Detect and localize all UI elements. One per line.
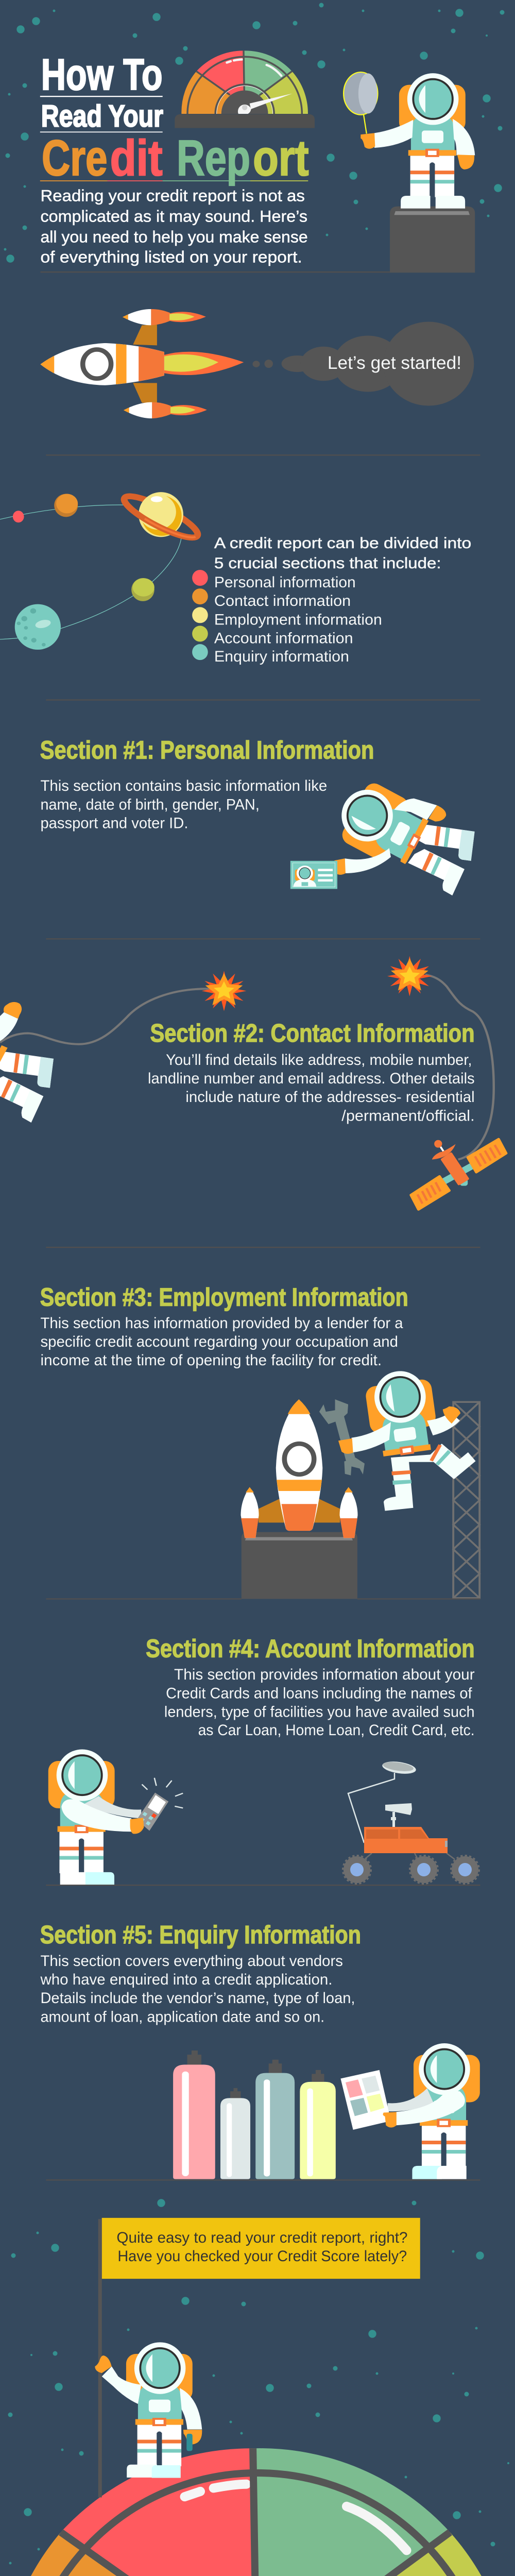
title: Cre bbox=[42, 130, 108, 186]
text: section 3: specific credit account regarding your occupation and bbox=[40, 1333, 398, 1350]
list of 5 sections: 5 crucial sections that include: bbox=[214, 554, 441, 572]
text: section 2: landline number and email address. Other details bbox=[148, 1070, 475, 1087]
list of 5 sections bbox=[192, 534, 471, 665]
text: section 2: /permanent/official. bbox=[341, 1107, 475, 1124]
panel: section 3 art and section 4 bbox=[46, 1368, 480, 1885]
satellite with tether bbox=[387, 956, 506, 1210]
panel: footer gauge and call to action bbox=[0, 2219, 515, 2576]
text: section 4: Credit Cards and loans including the names of bbox=[166, 1685, 472, 1702]
text: section 3 bbox=[40, 1314, 403, 1369]
intro text: complicated as it may sound. Here’s bbox=[40, 208, 307, 226]
panel: section 2 and section 3 text bbox=[0, 939, 506, 1369]
text: section 1: This section contains basic information like bbox=[40, 777, 327, 794]
callout flag bbox=[102, 2218, 420, 2279]
smoke cloud speech bubble: Let’s get started! bbox=[328, 352, 461, 372]
text: section 4: lenders, type of facilities you have availed such bbox=[164, 1703, 475, 1720]
title bbox=[40, 50, 309, 186]
text: section 2 bbox=[148, 1051, 475, 1124]
title: Read Your bbox=[41, 99, 163, 133]
list of 5 sections: A credit report can be divided into bbox=[214, 534, 471, 552]
icon: truss tower bbox=[453, 1402, 479, 1598]
heading: section 1: Section #1: Personal Information bbox=[40, 736, 374, 764]
floating astronaut with ID card bbox=[290, 780, 475, 895]
list of 5 sections: Contact information bbox=[214, 592, 351, 609]
icon: credit score gauge bbox=[175, 50, 315, 128]
panel: section 5 and callout bbox=[40, 1885, 480, 2279]
text: section 4 bbox=[164, 1666, 475, 1739]
astronaut repairing with wrench bbox=[319, 1368, 476, 1511]
astronaut with phone bbox=[48, 1749, 183, 1885]
text: section 5: Details include the vendor’s name, type of loan, bbox=[40, 1990, 355, 2007]
text: section 5: amount of loan, application date and so on. bbox=[40, 2008, 324, 2025]
astronaut with chart sheet bbox=[340, 2043, 480, 2179]
title: Rep bbox=[177, 130, 250, 186]
icon: four bottles bbox=[173, 2050, 336, 2179]
astronaut partly off-page with tether bbox=[0, 971, 246, 1123]
planets on orbit bbox=[0, 490, 202, 650]
text: section 5 bbox=[40, 1952, 355, 2025]
astronaut with magnifying glass on pedestal bbox=[344, 72, 475, 273]
astronaut holding flag bbox=[95, 2342, 202, 2478]
title: dit bbox=[110, 130, 163, 186]
heading: section 5: Section #5: Enquiry Information bbox=[40, 1921, 361, 1949]
flag pole bbox=[98, 2219, 102, 2497]
smoke cloud speech bubble bbox=[252, 322, 474, 406]
text: section 1 bbox=[40, 777, 327, 832]
intro text: all you need to help you make sense bbox=[40, 228, 308, 246]
list of 5 sections: Personal information bbox=[214, 573, 356, 591]
text: section 2: You’ll find details like address, mobile number, bbox=[166, 1051, 472, 1069]
text: section 5: who have enquired into a credit application. bbox=[40, 1971, 332, 1988]
intro text: of everything listed on your report. bbox=[40, 248, 302, 266]
text: section 1: name, date of birth, gender, PAN, bbox=[40, 796, 260, 813]
title: ort bbox=[253, 130, 309, 186]
list of 5 sections: Enquiry information bbox=[214, 648, 349, 665]
credit score gauge bbox=[0, 2448, 515, 2576]
intro text: Reading your credit report is not as bbox=[40, 187, 305, 205]
callout flag: Quite easy to read your credit report, right? bbox=[116, 2229, 408, 2246]
text: section 1: passport and voter ID. bbox=[40, 815, 188, 832]
heading: section 3: Section #3: Employment Information bbox=[40, 1283, 408, 1311]
icon: rocket on launch pedestal bbox=[241, 1399, 358, 1599]
list of 5 sections: Employment information bbox=[214, 611, 382, 628]
text: section 2: include nature of the addresses- residential bbox=[185, 1089, 475, 1106]
panel: hero and rocket bbox=[40, 50, 480, 455]
icon: rover bbox=[343, 1760, 479, 1884]
text: section 4: This section provides information about your bbox=[174, 1666, 475, 1683]
text: section 3: income at the time of opening the facility for credit. bbox=[40, 1352, 382, 1369]
callout flag: Have you checked your Credit Score lately? bbox=[117, 2248, 407, 2265]
list of 5 sections: Account information bbox=[214, 630, 353, 647]
icon: rocket bbox=[40, 308, 244, 420]
intro text bbox=[40, 187, 308, 266]
panel: five sections and section 1 bbox=[0, 490, 480, 895]
text: section 5: This section covers everything about vendors bbox=[40, 1952, 343, 1969]
title: How To bbox=[41, 50, 163, 99]
text: section 3: This section has information provided by a lender for a bbox=[40, 1314, 403, 1331]
text: section 4: as Car Loan, Home Loan, Credit Card, etc. bbox=[198, 1722, 475, 1739]
